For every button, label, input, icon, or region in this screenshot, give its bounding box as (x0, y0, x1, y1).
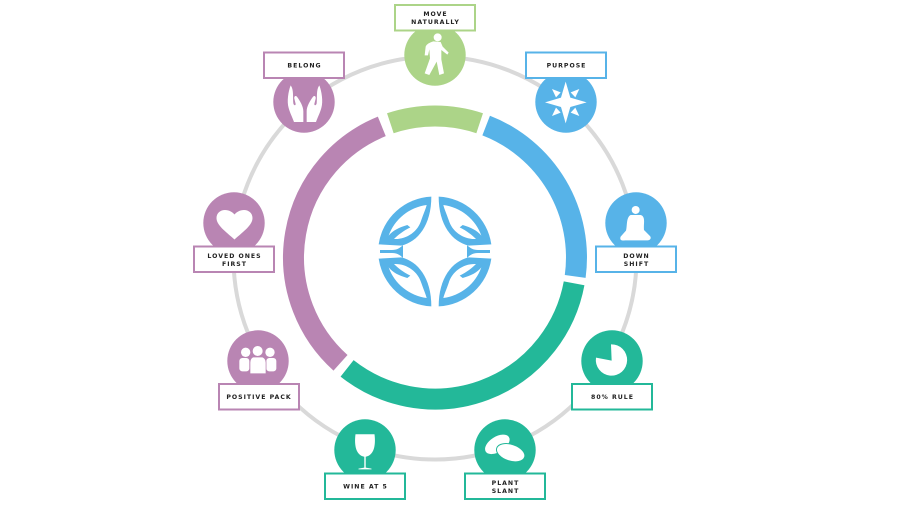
label: PURPOSE (547, 62, 586, 70)
segment: blue (486, 126, 576, 276)
circle (273, 71, 335, 133)
logo leaf: top left (379, 197, 431, 246)
label: BELONG (287, 62, 322, 70)
node: positive pack (219, 330, 299, 410)
circle (404, 24, 466, 86)
circle (581, 330, 643, 392)
icon: open hands (288, 85, 322, 122)
icon: beans (482, 431, 527, 465)
central logo (379, 197, 491, 306)
icon: group of people (239, 346, 276, 374)
label: WINE AT 5 (343, 484, 388, 490)
label (596, 246, 676, 272)
segment: green (390, 116, 480, 123)
circle (227, 330, 289, 392)
node: plant slant (465, 419, 545, 499)
icon: meditating person (620, 206, 651, 241)
label: FIRST (222, 261, 247, 268)
label: 80% RULE (591, 394, 634, 401)
segment: purple (294, 126, 382, 363)
node: down shift (596, 192, 676, 272)
label: PLANT (492, 480, 519, 487)
node: move naturally (395, 5, 475, 86)
node: 80% rule (572, 330, 652, 410)
logo leaf: top right (439, 197, 491, 246)
icon: walking person (425, 33, 449, 75)
label (194, 246, 274, 272)
label: SLANT (492, 488, 519, 495)
circle (605, 192, 667, 254)
segmented colored ring (294, 116, 576, 399)
icon: wine glass (355, 434, 375, 469)
logo leaf: bottom right (439, 257, 491, 306)
icon: compass star (545, 82, 587, 123)
circle (334, 419, 396, 481)
label: POSITIVE PACK (226, 394, 292, 401)
segment: teal (347, 283, 574, 399)
label: MOVE (423, 11, 448, 18)
circle (203, 192, 265, 254)
label: LOVED ONES (207, 253, 262, 260)
label: SHIFT (624, 261, 649, 268)
label (395, 5, 475, 30)
label: NATURALLY (411, 19, 460, 26)
logo bars (380, 245, 490, 258)
node: belong (264, 52, 344, 133)
icon: pie chart (596, 344, 627, 376)
label: DOWN (623, 253, 650, 260)
label (465, 474, 545, 499)
node: purpose (526, 52, 606, 133)
circle (474, 419, 536, 481)
circle (535, 71, 597, 133)
icon: heart (216, 210, 252, 240)
outer gray ring (234, 56, 636, 460)
node: wine at 5 (325, 419, 405, 499)
logo leaf: bottom left (379, 257, 431, 306)
node: loved ones first (194, 192, 274, 272)
